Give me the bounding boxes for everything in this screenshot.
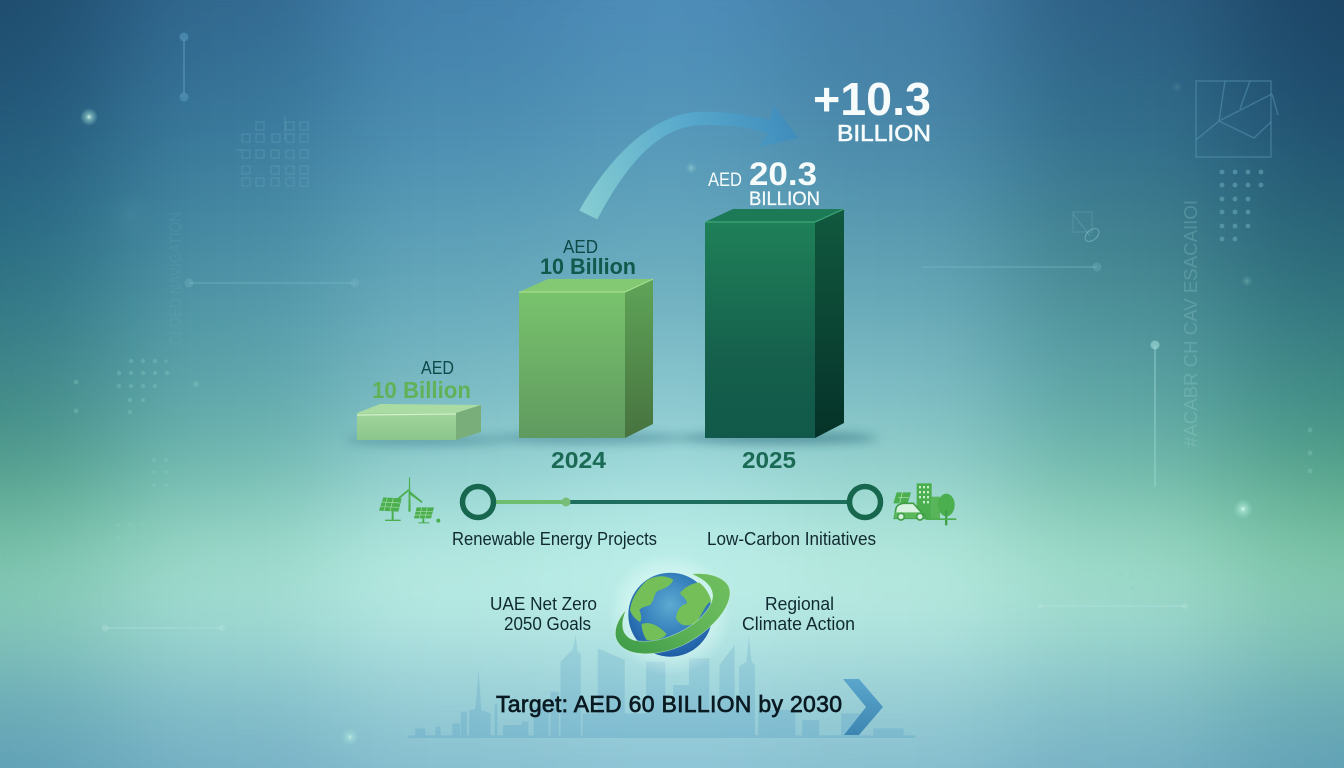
timeline end node — [850, 486, 880, 518]
label: UAE net zero 2050 goals — [490, 594, 597, 634]
label: AED 20.3 billion: 20.3 — [749, 156, 817, 192]
label: regional climate action: Climate Action — [742, 614, 855, 634]
label: first bar AED 10 billion: 10 Billion — [372, 377, 471, 403]
icon: city, electric car and tree — [893, 483, 956, 525]
label: AED 20.3 billion: BILLION — [749, 189, 820, 210]
icon: globe with green orbit — [608, 552, 732, 676]
decorative background tech elements: CLOED NAVIGATION — [166, 212, 185, 345]
timeline start node — [462, 486, 494, 518]
target text: Target: AED 60 BILLION by 2030 — [496, 691, 842, 717]
year label 2025: 2025 — [742, 447, 796, 473]
label: low-carbon initiatives: Low-Carbon Initiatives — [707, 529, 876, 549]
label: renewable energy projects: Renewable Energy Projects — [452, 529, 657, 549]
bar 2023 — [345, 404, 505, 446]
timeline connector — [462, 486, 880, 518]
label: regional climate action: Regional — [765, 594, 834, 614]
decorative background tech elements: #ACABR CH CAV ESACAIIOI — [1181, 200, 1201, 447]
label: plus 10.3 billion: BILLION — [837, 120, 931, 146]
bar 2024 — [495, 279, 685, 444]
label: UAE net zero 2050 goals: UAE Net Zero — [490, 594, 597, 614]
label: 2024 AED 10 billion: 10 Billion — [540, 254, 636, 279]
label: first bar AED 10 billion: AED — [421, 358, 454, 378]
growth arrow — [579, 105, 798, 219]
label: AED 20.3 billion — [708, 156, 820, 210]
icon: wind turbine and solar panels — [379, 477, 440, 523]
label: first bar AED 10 billion — [372, 358, 471, 403]
label: regional climate action — [742, 594, 855, 634]
year label 2024: 2024 — [551, 447, 606, 473]
bar 2025 — [678, 209, 878, 444]
target chevron arrow — [843, 679, 883, 735]
skyline silhouette — [408, 635, 915, 738]
label: 2024 AED 10 billion: AED — [563, 237, 598, 257]
label: 2024 AED 10 billion — [540, 237, 636, 279]
label: AED 20.3 billion: AED — [708, 170, 742, 191]
label: UAE net zero 2050 goals: 2050 Goals — [504, 614, 591, 634]
label: plus 10.3 billion: +10.3 — [813, 73, 931, 125]
